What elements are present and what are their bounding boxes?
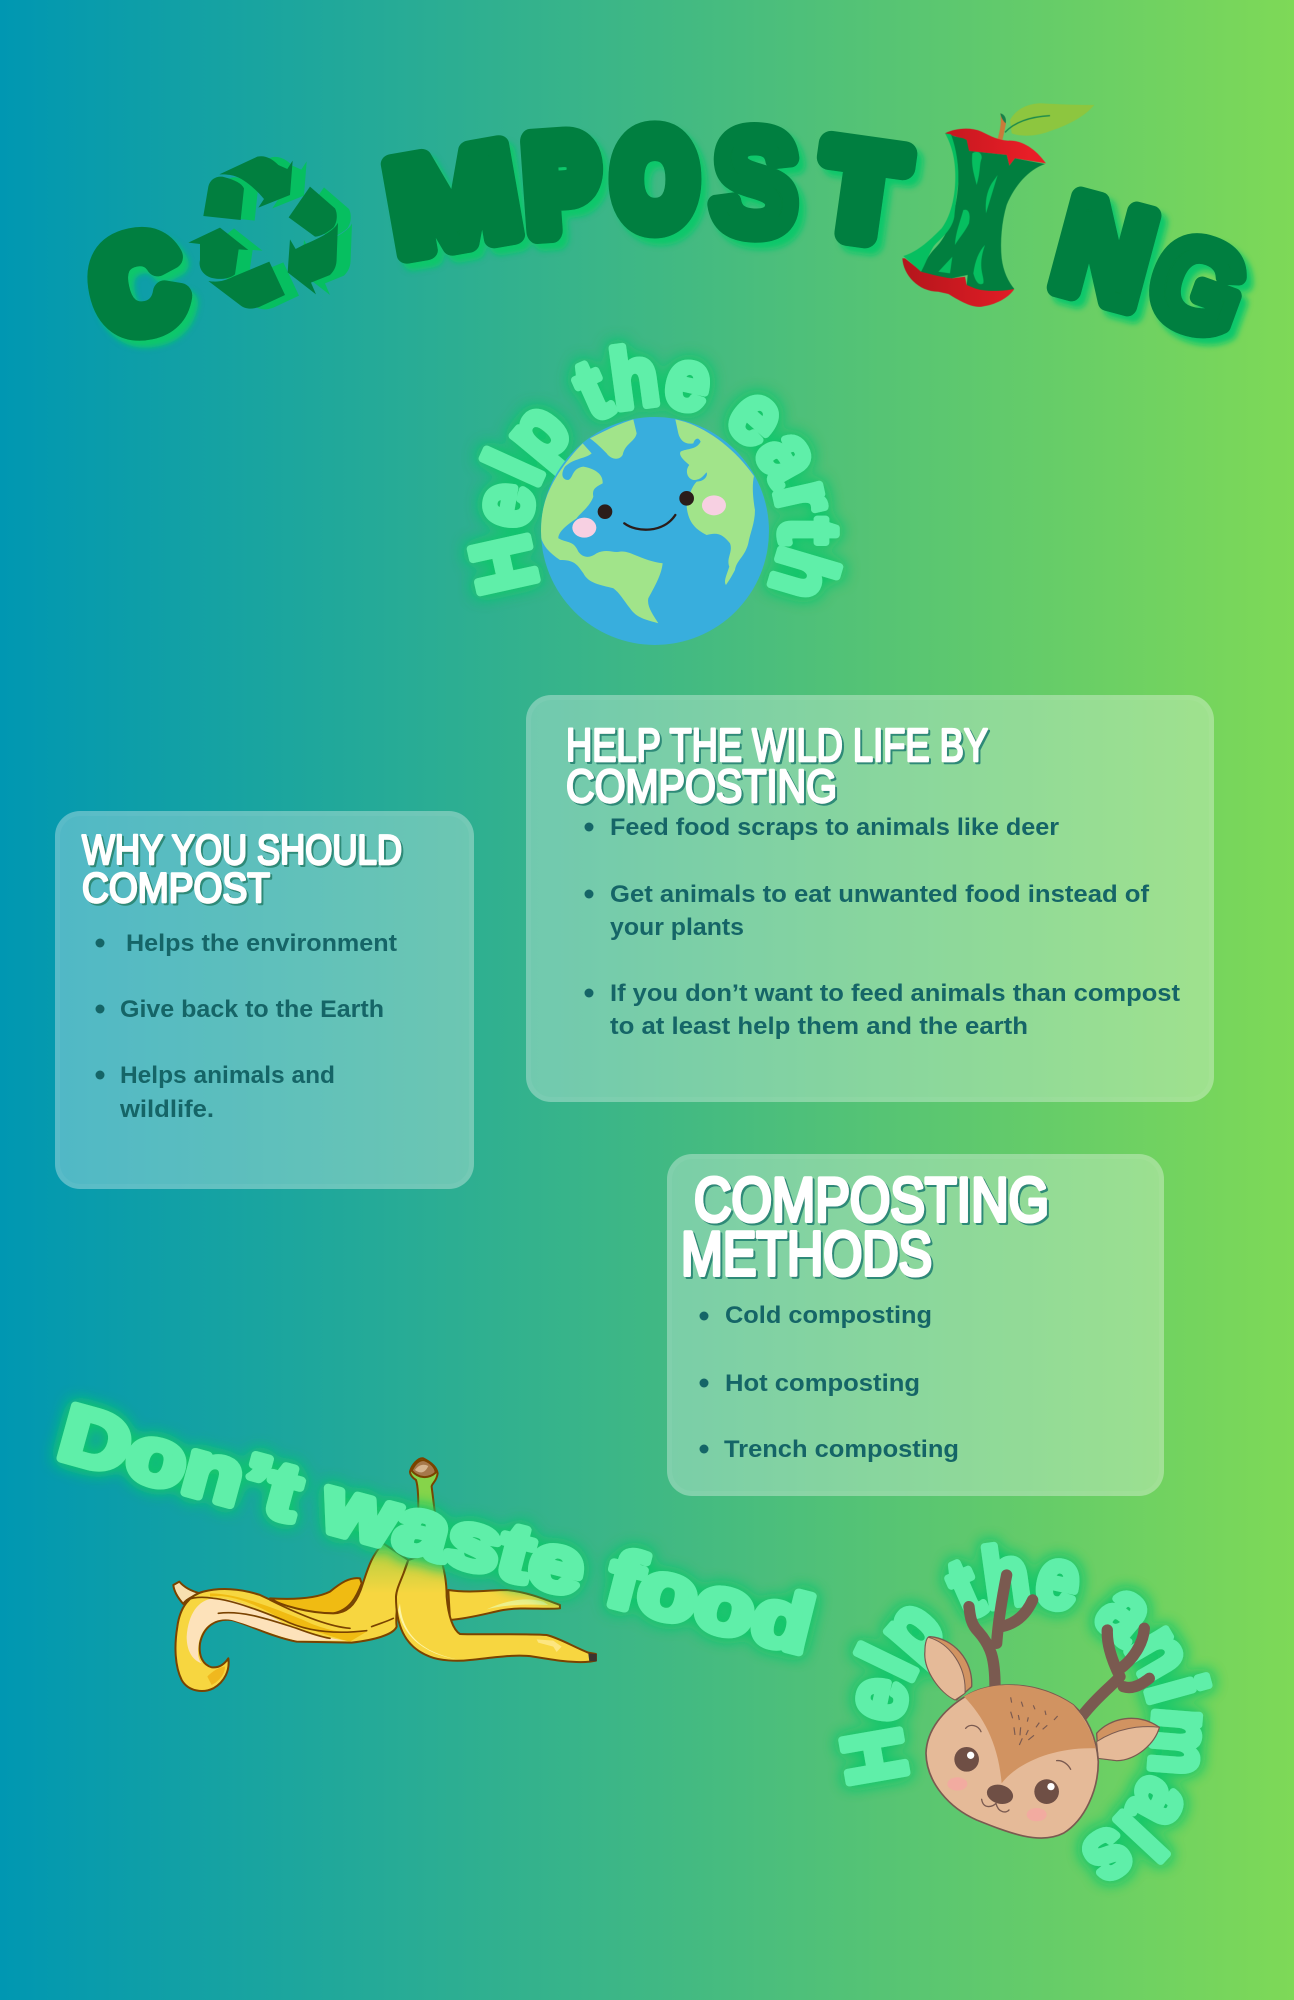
bullet list: reasons: Helps animals and [120,1062,335,1089]
bullet list: methods: Hot composting [725,1370,920,1397]
icon: deer head [925,1575,1159,1838]
curved text and earth illustration [458,334,854,645]
heading: help the wild life by composting [566,719,988,812]
bullet list: methods [700,1302,959,1463]
icon: smiling earth [541,417,769,645]
heading: why you should compost: COMPOST [82,864,270,911]
curved text: Help the earth: Help the earth [458,334,854,609]
title letter T: T [814,116,910,267]
bullet list: reasons [96,930,397,1123]
heading: help the wild life by composting: COMPOSTING [566,760,837,812]
heading: help the wild life by composting: HELP THE WILD LIFE BY [566,719,988,771]
icon: banana peel [173,1458,597,1691]
panel: composting methods [667,1154,1164,1496]
bullet list: reasons: Helps the environment [126,930,397,957]
heading: composting methods: COMPOSTING [694,1166,1049,1235]
title: COMPOSTING [82,100,1264,366]
bullet list: methods: Cold composting [725,1302,932,1329]
bullet list: methods: Trench composting [724,1436,959,1463]
curved text: Help the animals: Help the animals [828,1531,1224,1893]
icon: recycling arrows as letter O [188,156,352,309]
panel: help the wild life [526,695,1214,1102]
curved text: Don't waste food: Don’t waste food [46,1392,827,1666]
bullet list: wildlife tips: your plants [610,914,744,941]
title letter P: P [522,111,602,260]
bullet list: wildlife tips: If you don’t want to feed animals than compost [610,980,1180,1007]
bullet list: wildlife tips [584,814,1180,1040]
heading: why you should compost: WHY YOU SHOULD [82,826,402,873]
bullet list: reasons: wildlife. [119,1096,214,1123]
bullet list: wildlife tips: Get animals to eat unwanted food instead of [610,881,1150,908]
bullet list: wildlife tips: to at least help them and the earth [610,1013,1028,1040]
title letter O: O [615,106,695,252]
icon: apple core as letter I [902,103,1094,307]
title letter M: M [376,114,529,284]
heading: composting methods: METHODS [681,1220,932,1289]
title letter S: S [709,100,801,265]
title letter G: G [1132,206,1264,366]
heading: composting methods [681,1166,1049,1289]
panel: why you should compost [55,811,474,1189]
title letter C: C [82,207,194,362]
bullet list: reasons: Give back to the Earth [120,996,384,1023]
title letter N: N [1041,166,1168,336]
heading: why you should compost [82,826,402,911]
bullet list: wildlife tips: Feed food scraps to animals like deer [610,814,1059,841]
